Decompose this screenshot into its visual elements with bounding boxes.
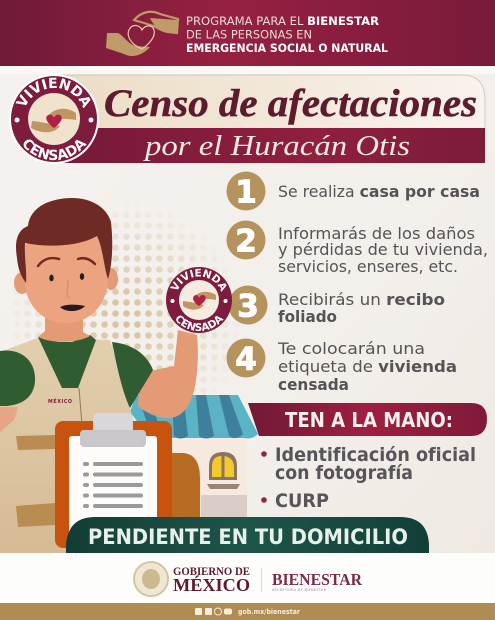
gobierno de mexico wordmark [173,564,250,595]
checklist: CURP [275,490,329,512]
heading pill: ten a la mano [248,403,487,436]
badge: vivienda censada held in hand: CENSADA [176,316,224,332]
vest seam [79,388,82,425]
title text: Censo de afectaciones [104,82,477,125]
gobierno de mexico wordmark: MÉXICO [173,574,250,595]
banner: pendiente en tu domicilio: PENDIENTE EN TU DOMICILIO [88,525,408,549]
white strip below header [0,66,495,74]
step 2 [226,220,488,276]
icon: hands holding heart [106,12,178,56]
nose [67,280,70,298]
bienestar wordmark: BIENESTAR [272,570,363,589]
strap lower [16,503,55,527]
halftone dots behind character [16,212,234,421]
checklist [261,444,476,512]
step 4 [226,338,457,394]
step 2: servicios, enseres, etc. [278,257,458,276]
step 3: foliado [278,307,337,326]
store illustration [130,395,258,518]
step 1: 1 [235,174,257,210]
step 3: 3 [237,288,259,324]
footer social bar: gob.mx/bienestar [238,608,300,616]
heading pill: ten a la mano: TEN A LA MANO: [285,408,453,432]
store awning [130,395,258,438]
header band [0,0,495,66]
checklist: Identificación oficial [275,444,476,466]
vest and body [0,337,135,553]
badge: vivienda censada large: CENSADA [24,140,87,160]
eyes [49,275,54,281]
clipboard [55,413,172,551]
step 2: 2 [235,224,257,260]
step 1: Se realiza casa por casa [278,182,480,201]
bienestar wordmark: SECRETARÍA DE BIENESTAR [272,587,327,592]
footer social bar [0,603,495,620]
subtitle text: por el Huracán Otis [143,130,410,162]
step 3: Recibirás un recibo [278,290,445,309]
step 1 [226,172,480,210]
green shirt collar [38,335,96,388]
badge: vivienda censada held in hand [166,267,232,333]
title banner [50,75,485,163]
footer logos [0,553,495,603]
left forearm [0,407,18,432]
step 4: Te colocarán una [277,339,425,358]
social icons [195,608,232,615]
strap upper [16,435,55,450]
arm raising sticker [138,330,198,418]
neck [38,310,90,342]
step 4: etiqueta de vivienda [278,357,457,376]
character: census worker [0,198,198,553]
icon: national emblem [134,562,168,596]
badge: vivienda censada large [9,74,99,164]
step 2: y pérdidas de tu vivienda, [278,240,488,259]
store window [207,452,240,489]
step 4: censada [278,375,349,394]
gobierno de mexico wordmark: GOBIERNO DE [173,564,250,578]
vest label: MÉXICO [48,397,72,405]
ears [14,272,30,294]
face [24,235,108,323]
checklist: con fotografía [275,462,413,484]
step 4: 4 [235,342,257,378]
green sleeve right [112,342,153,408]
badge: vivienda censada held in hand: VIVIENDA [170,268,227,292]
hair [16,198,112,283]
header text: DE LAS PERSONAS EN [186,28,312,42]
step 3 [228,286,445,326]
banner: pendiente en tu domicilio [66,517,429,553]
green sleeve left [0,350,35,406]
step 2: Informarás de los daños [278,224,475,243]
mouth [60,305,85,311]
header text: EMERGENCIA SOCIAL O NATURAL [186,41,389,55]
header text [186,14,389,55]
eyebrows [38,258,95,266]
badge: vivienda censada large: VIVIENDA [16,78,90,108]
header text: PROGRAMA PARA EL BIENESTAR [186,14,379,28]
